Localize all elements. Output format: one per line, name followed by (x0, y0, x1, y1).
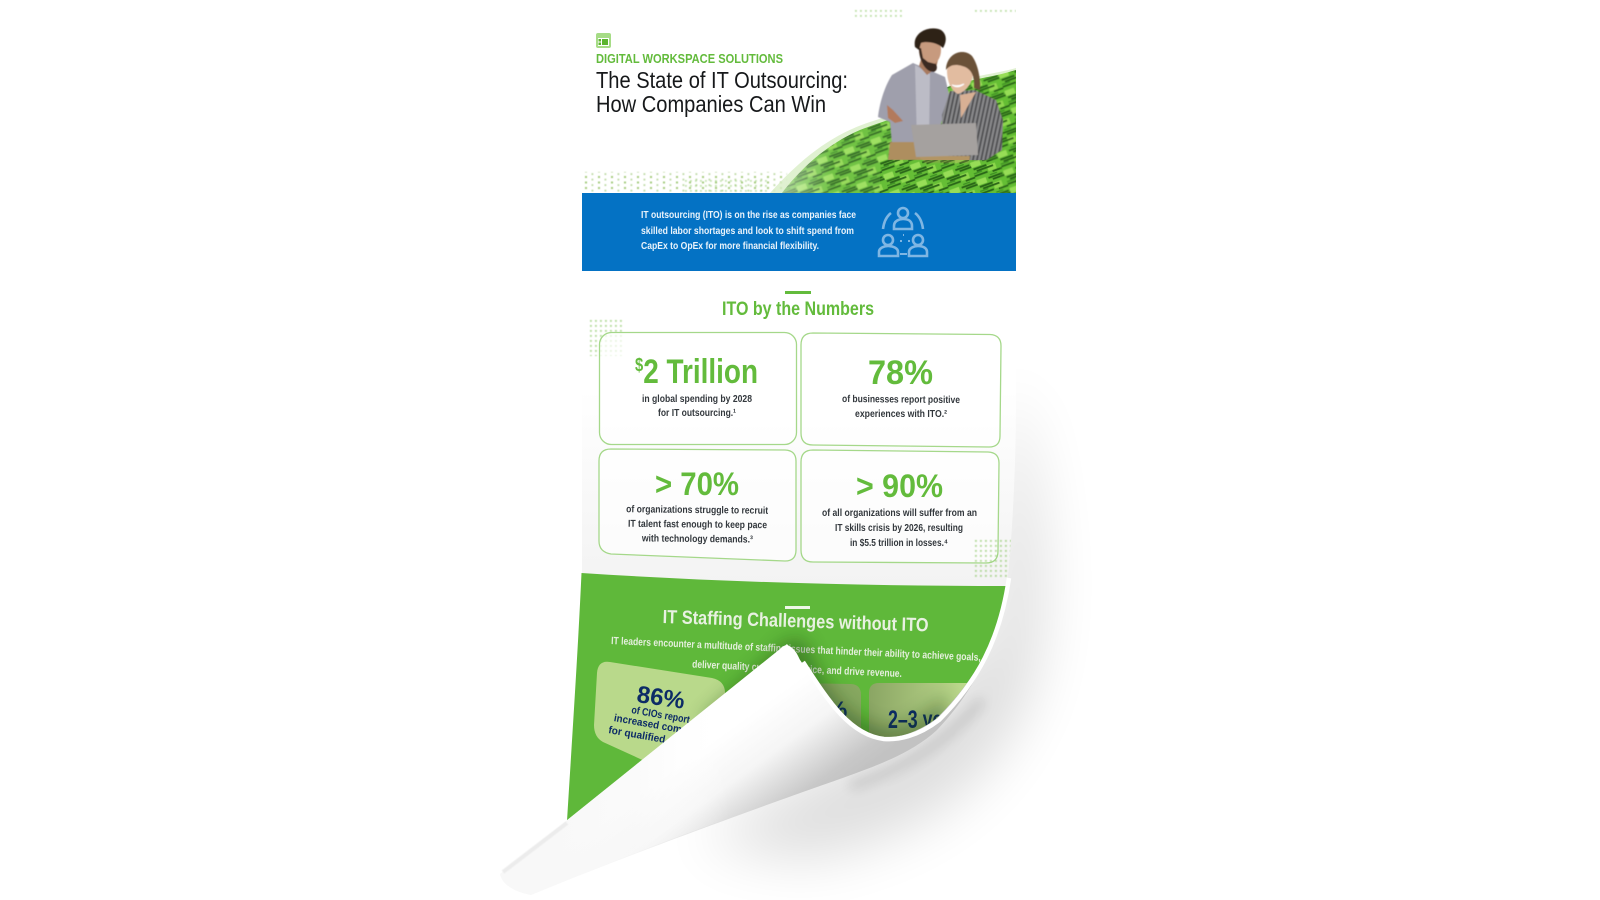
stat: > 70% (655, 466, 739, 502)
intro text: skilled labor shortages and look to shift spend from (641, 225, 854, 237)
description: for IT outsourcing.¹ (658, 408, 737, 419)
intro text (641, 209, 856, 252)
card: $2 Trillion (600, 332, 796, 444)
description: experiences with ITO.² (855, 409, 948, 420)
stat: % (826, 697, 847, 724)
description: of organizations struggle to recruit (626, 504, 769, 517)
icon: connected people (879, 208, 927, 256)
card: second statistic (733, 682, 861, 770)
description (842, 394, 960, 420)
page background (582, 482, 1014, 586)
stat: 2–3 years (888, 706, 969, 734)
description (642, 394, 752, 419)
dot texture near first card (590, 320, 622, 356)
description: increased competition (613, 712, 717, 742)
tan trousers (918, 156, 970, 163)
intro text: CapEx to OpEx for more financial flexibility. (641, 240, 819, 252)
infographic page (560, 0, 1020, 600)
card: 2–3 years (869, 683, 1000, 770)
stat: $ (635, 355, 643, 375)
card: 86% (594, 662, 725, 768)
title: The State of IT Outsourcing: (596, 67, 848, 93)
stat: 2 Trillion (643, 353, 758, 391)
dot texture near last card (974, 540, 1011, 578)
flap surface (500, 586, 1007, 895)
description: of CIOs report (630, 704, 691, 726)
curl shadow on green (700, 640, 950, 760)
man (878, 28, 949, 160)
stat: 78% (868, 354, 933, 392)
title (596, 67, 848, 117)
heading divider (785, 291, 811, 294)
green background (567, 573, 1006, 820)
woman (942, 52, 1003, 161)
description: of businesses report positive (842, 394, 960, 406)
page curl (500, 578, 1009, 895)
eyebrow: DIGITAL WORKSPACE SOLUTIONS (596, 51, 783, 66)
description: in global spending by 2028 (642, 394, 752, 405)
description: for qualified candidates (607, 724, 721, 756)
panel: IT staffing challenges (567, 573, 1006, 820)
description: IT talent fast enough to keep pace (628, 519, 767, 531)
description (626, 504, 769, 546)
icon: digital workspace (596, 33, 611, 48)
lower fade over people (880, 160, 1000, 193)
description: with technology demands.³ (641, 533, 753, 546)
stat: 86% (635, 681, 686, 715)
description: IT skills crisis by 2026, resulting (835, 523, 963, 534)
description: in $5.5 trillion in losses.⁴ (850, 538, 948, 549)
description (822, 508, 977, 549)
card: 78% (801, 333, 1001, 447)
laptop (911, 123, 978, 157)
description (607, 704, 721, 756)
curl white rim (803, 578, 1009, 739)
intro line one: IT leaders encounter a multitude of staffing issues that hinder their ability to achieve goals, (611, 635, 981, 664)
intro text: IT outsourcing (ITO) is on the rise as companies face (641, 209, 856, 221)
card: over 90% (801, 450, 999, 563)
description: of all organizations will suffer from an (822, 508, 977, 519)
heading divider (785, 606, 810, 609)
page drop shadow (700, 380, 1043, 860)
panel: blue intro band (580, 193, 1020, 271)
flap tail edge (503, 823, 567, 872)
card: over 70% (599, 449, 796, 561)
header dot texture, top (854, 10, 1016, 18)
header green wave (770, 60, 1020, 195)
photo: two colleagues with a laptop (878, 28, 1003, 163)
header dot texture, bottom left (582, 172, 787, 192)
flap highlight fade (500, 649, 800, 895)
intro line two: deliver quality customer service, and drive revenue. (692, 659, 902, 680)
heading: ITO by the Numbers: ITO by the Numbers (722, 299, 874, 320)
stat: > 90% (856, 468, 943, 504)
heading: IT Staffing Challenges without ITO (662, 607, 929, 636)
title: How Companies Can Win (596, 91, 826, 117)
